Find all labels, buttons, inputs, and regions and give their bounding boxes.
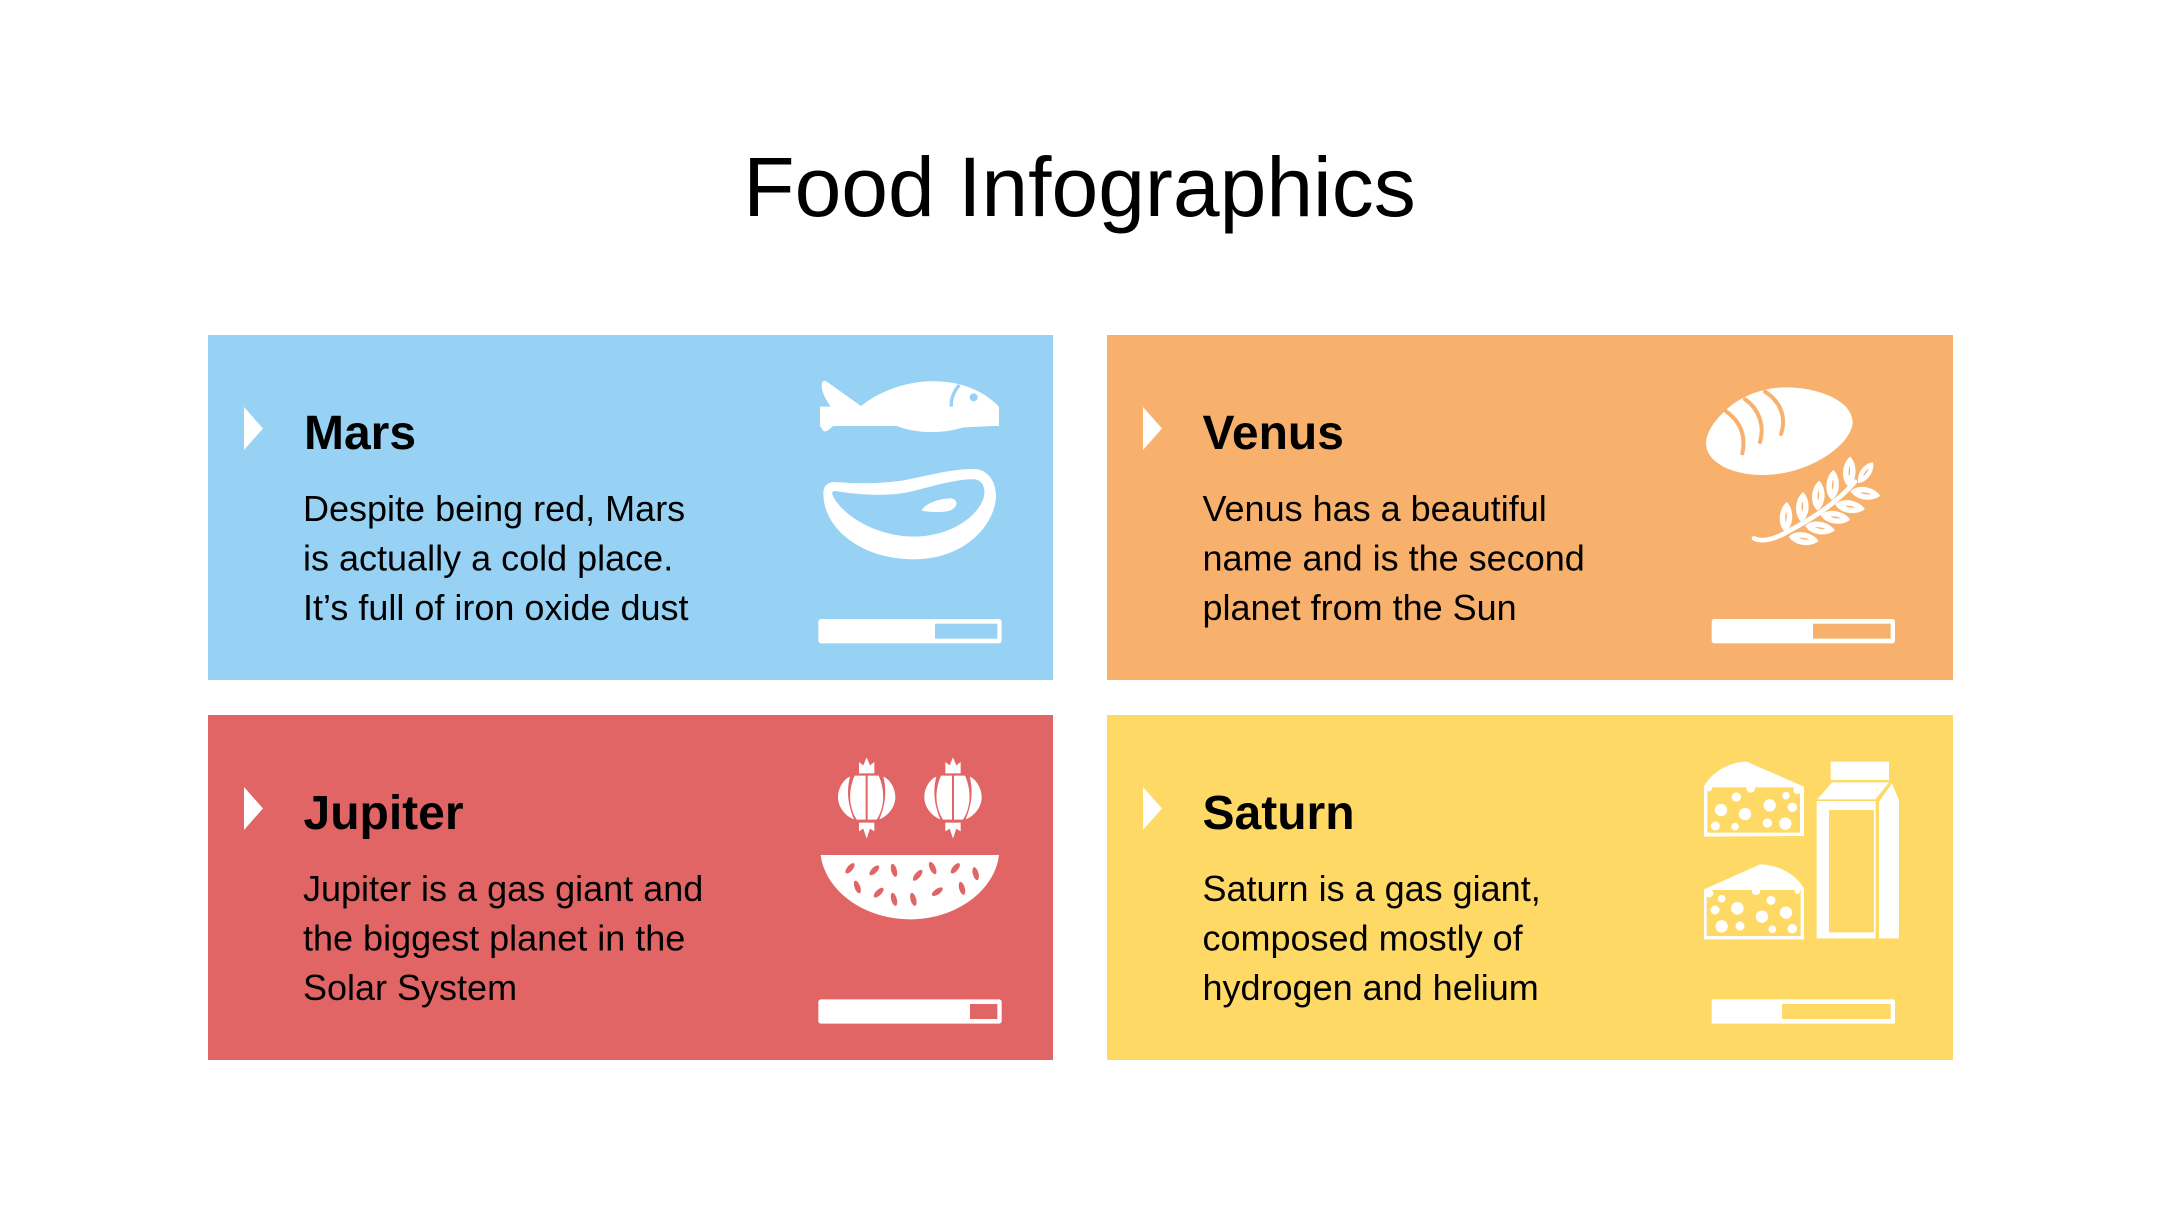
icon: steak (823, 469, 996, 559)
card background (208, 335, 1053, 680)
heading: Saturn (1202, 787, 1355, 840)
icon: watermelon slice (821, 855, 999, 919)
progress bar (818, 999, 1002, 1024)
card background (1107, 335, 1953, 680)
icon: right pomegranate (924, 757, 982, 839)
body text: Despite being red, Mars (303, 488, 685, 529)
body text: planet from the Sun (1202, 587, 1517, 628)
card background (1107, 715, 1953, 1060)
body text: Solar System (303, 967, 517, 1008)
body text: composed mostly of (1202, 918, 1524, 959)
arrow (1143, 407, 1162, 450)
progress bar (1712, 619, 1895, 643)
icon: fish (820, 381, 999, 432)
body text: Jupiter is a gas giant and (303, 868, 703, 909)
arrow (244, 407, 263, 450)
icon: wheat (1754, 456, 1881, 547)
heading: Mars (304, 407, 416, 460)
body text: name and is the second (1202, 538, 1585, 579)
icon: bread (1706, 387, 1853, 475)
arrow (244, 787, 263, 830)
title: Food Infographics (743, 140, 1416, 234)
progress bar (1712, 999, 1895, 1024)
panel: Mars (208, 335, 1053, 680)
heading: Jupiter (304, 787, 464, 840)
icon: bottom cheese wedge (1704, 864, 1804, 939)
panel: Jupiter (208, 715, 1053, 1060)
card background (208, 715, 1053, 1060)
body text: Saturn is a gas giant, (1202, 868, 1541, 909)
progress bar (818, 619, 1002, 643)
body text: the biggest planet in the (303, 918, 685, 959)
heading: Venus (1202, 407, 1344, 460)
icon: top cheese wedge (1704, 762, 1804, 837)
icon: milk carton (1817, 762, 1899, 938)
body text: hydrogen and helium (1202, 967, 1539, 1008)
body text: Venus has a beautiful (1202, 488, 1547, 529)
icon: left pomegranate (838, 757, 895, 839)
body text: It’s full of iron oxide dust (303, 587, 689, 628)
body text: is actually a cold place. (303, 538, 673, 579)
panel: Saturn (1107, 715, 1953, 1060)
panel: Venus (1107, 335, 1953, 680)
arrow (1143, 787, 1162, 830)
